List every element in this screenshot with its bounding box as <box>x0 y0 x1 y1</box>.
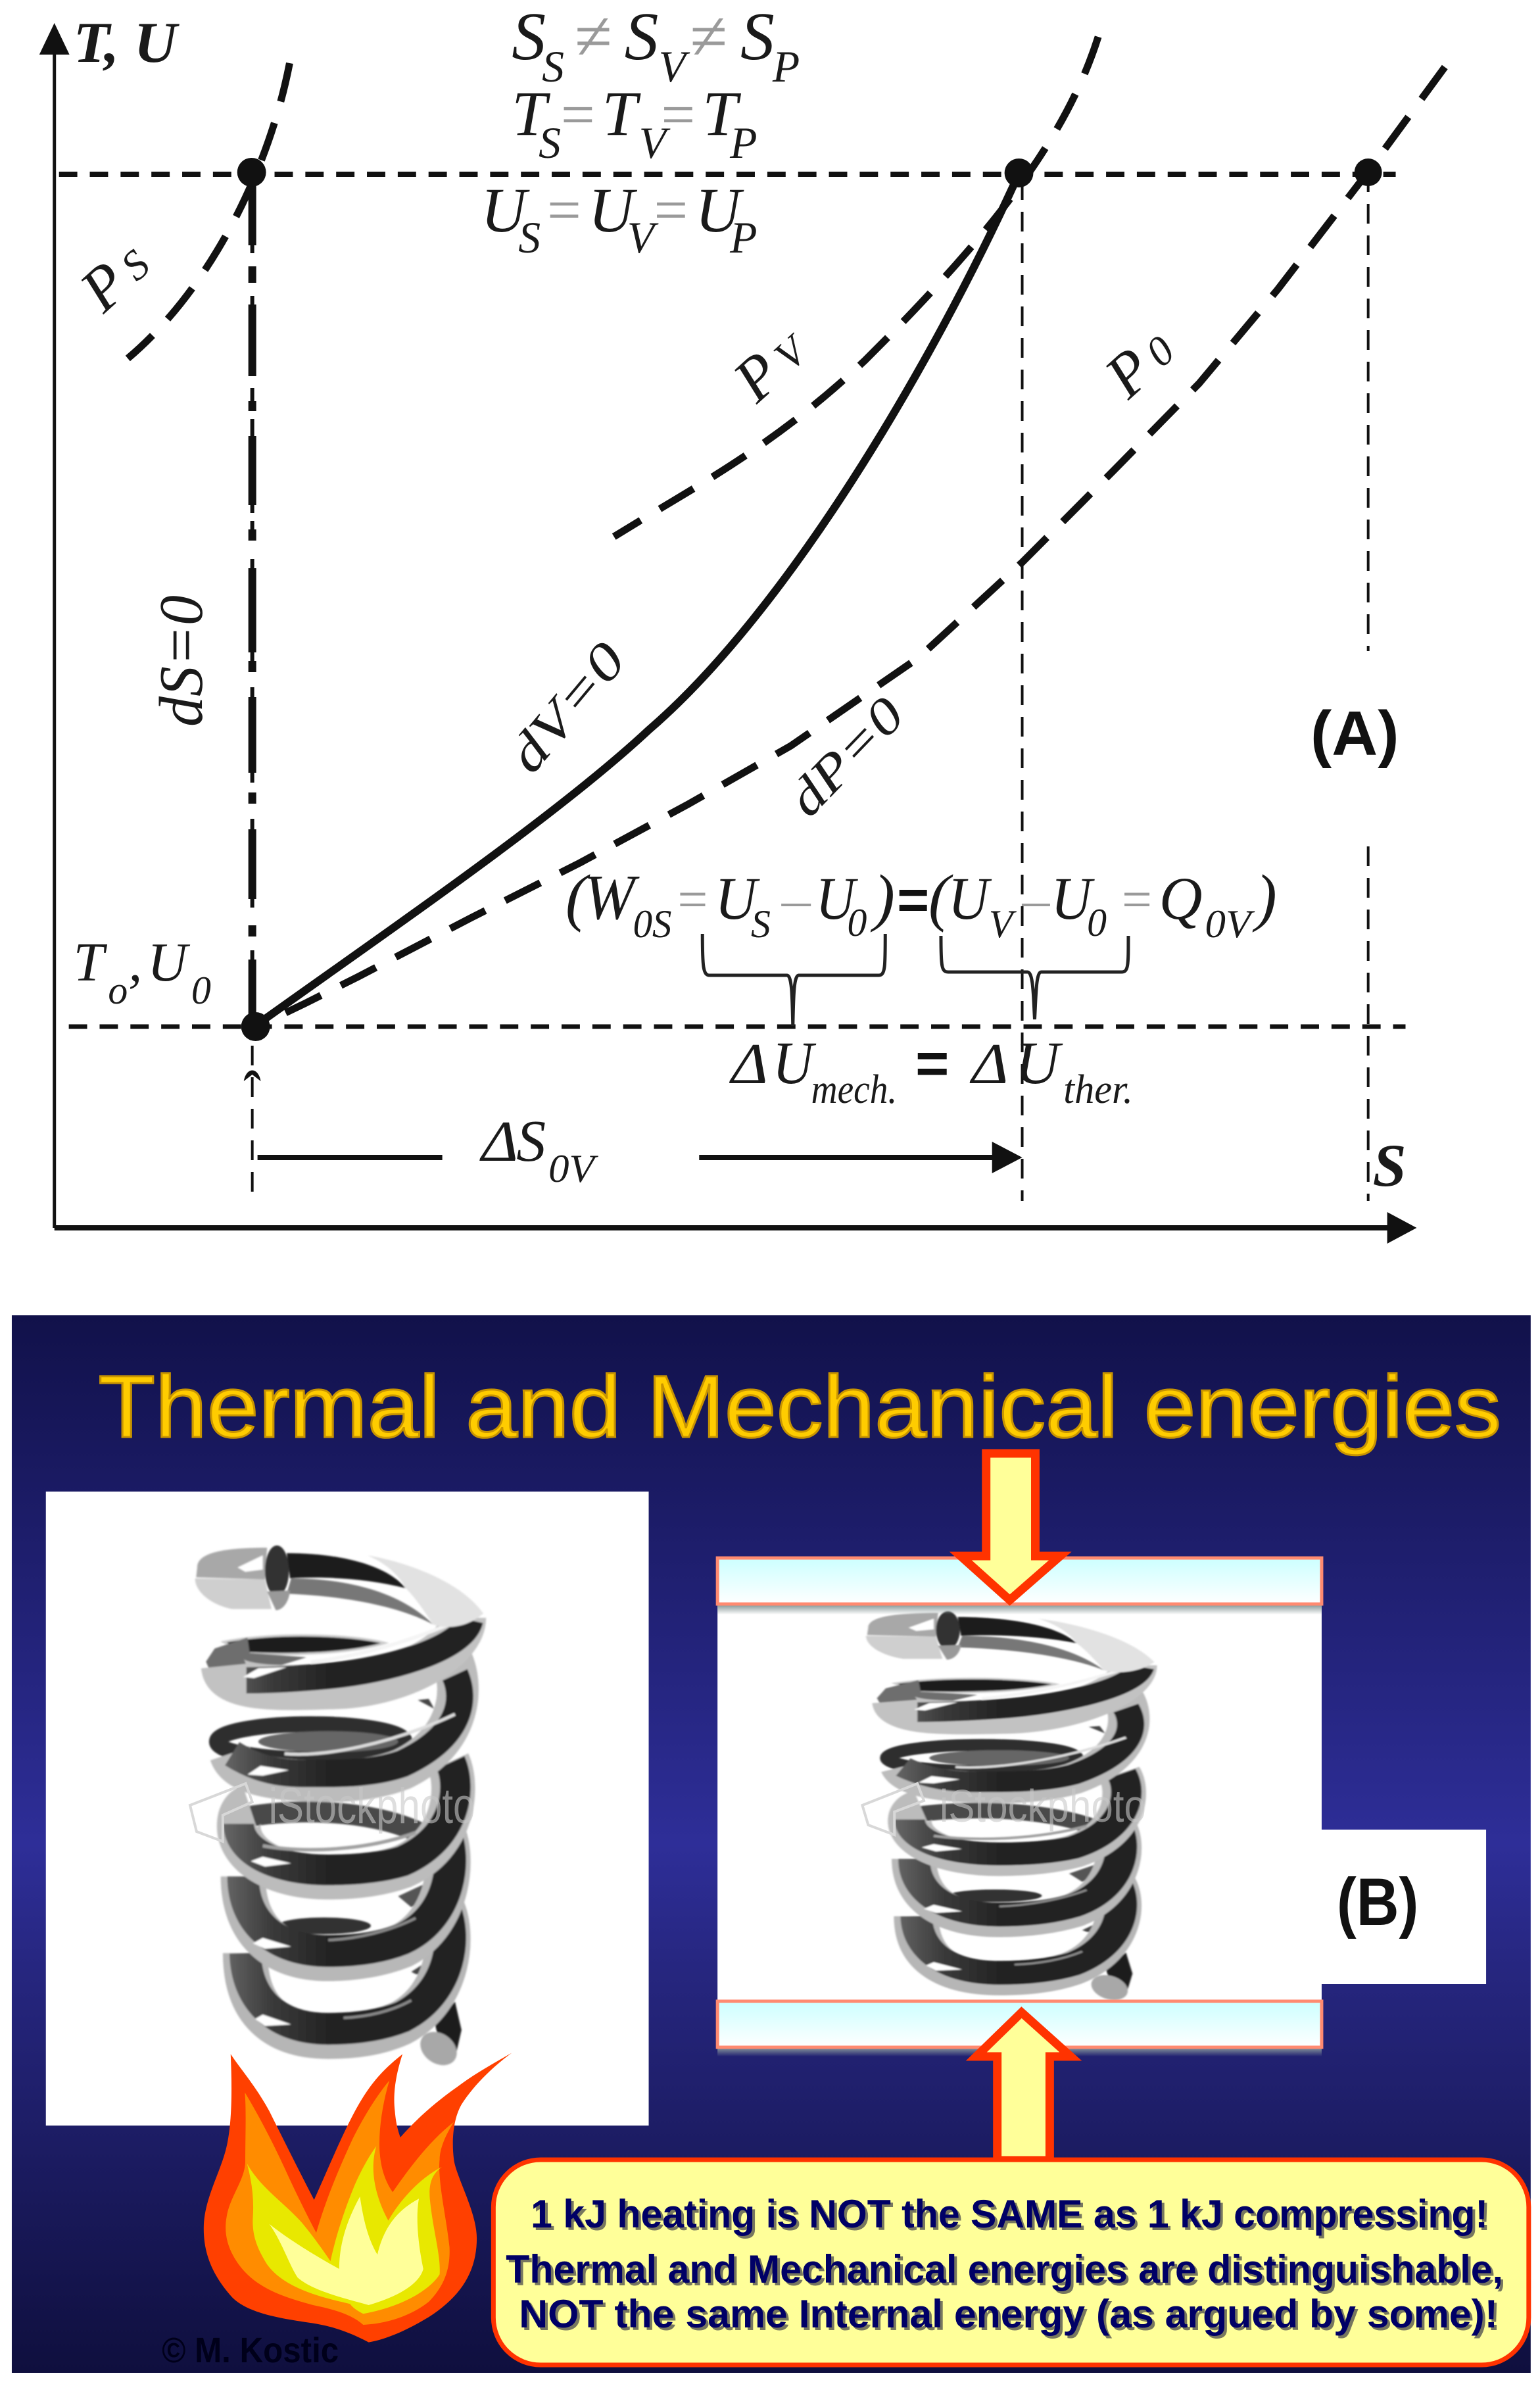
equation: delta U mechanical equals delta U thermal <box>729 1029 1133 1112</box>
right photo panel: compressed spring <box>717 1557 1486 2010</box>
label: entropy inequality: S <box>740 0 775 74</box>
horizontal dashed line at reference temperature <box>69 1025 1405 1029</box>
callout line 2: Thermal and Mechanical energies are distinguishable, <box>508 2250 1506 2294</box>
curve label: P_S: S <box>112 241 158 289</box>
equation: work equals heat <box>565 862 1277 946</box>
panel B: thermal and mechanical energies slide <box>12 1315 1531 2373</box>
equation: work equals heat: = <box>1122 869 1152 929</box>
label: entropy inequality <box>512 0 800 91</box>
label: entropy inequality: ≠ <box>575 0 612 74</box>
arrow: compressing down <box>961 1453 1060 1600</box>
label: temperature equality: V <box>639 118 671 168</box>
curve label: P_S: P <box>66 249 141 325</box>
equation: delta U mechanical equals delta U thermal: mech. <box>811 1067 897 1112</box>
isobar curve P_S <box>128 63 289 358</box>
brace: mechanical work <box>702 934 885 1026</box>
arrow: compressing up <box>976 2012 1071 2160</box>
label: T0, U0 <box>74 932 211 1012</box>
label: internal energy equality: V <box>627 213 659 262</box>
small mark under start point <box>244 1071 261 1081</box>
equation: work equals heat: 0S <box>633 902 671 946</box>
label: temperature equality: P <box>729 118 757 168</box>
label: T0, U0: U <box>147 932 191 993</box>
panel label: (B): (B) <box>1337 1864 1418 1939</box>
curve label: P_V <box>720 313 823 415</box>
curve label: dS=0: dS=0 <box>146 595 216 727</box>
label: entropy inequality: S <box>512 0 546 74</box>
label: delta S 0V: S <box>516 1109 546 1174</box>
watermark: iStockphoto <box>940 1780 1146 1832</box>
equation: work equals heat: S <box>751 902 771 946</box>
equation: work equals heat: 0 <box>1087 901 1107 944</box>
label: internal energy equality: U <box>589 176 638 245</box>
equation: work equals heat: ( <box>565 862 590 933</box>
state points <box>237 158 1382 1041</box>
panel label: (A): (A) <box>1311 698 1399 769</box>
axes with arrows <box>39 23 1416 1244</box>
chart panel A: T-S diagram <box>39 0 1445 1244</box>
label: internal energy equality: = <box>547 176 581 243</box>
entropy change arrow <box>258 1142 1023 1173</box>
constant volume curve dV=0 <box>254 174 1019 1027</box>
equation: work equals heat: 0V <box>1205 902 1255 946</box>
equation: work equals heat: U <box>948 865 992 932</box>
label: internal energy equality <box>481 176 757 262</box>
label: temperature equality: T <box>602 79 641 149</box>
equation: work equals heat: ( <box>928 862 953 933</box>
equation: work equals heat: – <box>1022 869 1050 929</box>
label: T0, U0: o <box>108 969 128 1012</box>
callout line 3: NOT the same Internal energy (as argued by some)! <box>519 2292 1498 2336</box>
curve label: P_0: 0 <box>1136 327 1184 376</box>
axis label: T, U: T, U <box>74 11 180 75</box>
icon: flame <box>204 2053 512 2343</box>
axis label: S: S <box>1373 1132 1407 1199</box>
label: delta S 0V: Δ <box>479 1110 518 1174</box>
constant entropy line dS=0 <box>249 172 256 1027</box>
curve label: P_S <box>66 229 162 325</box>
label: temperature equality <box>512 79 757 168</box>
label: entropy inequality: S <box>625 0 658 74</box>
equation: work equals heat: = <box>677 869 708 929</box>
label: internal energy equality: U <box>695 176 744 245</box>
horizontal dashed line at high temperature <box>59 172 1396 177</box>
copyright credit: © M. Kostic <box>162 2331 339 2370</box>
label: delta S 0V <box>479 1109 599 1190</box>
icon: spring compressed <box>866 1611 1154 2005</box>
callout line 3: NOT the same Internal energy (as argued by some)! <box>521 2295 1501 2339</box>
label: entropy inequality: P <box>772 42 800 91</box>
label: T0, U0: 0 <box>191 969 211 1012</box>
isobar curve P_V <box>614 37 1098 537</box>
watermark <box>190 1778 475 1841</box>
equation: work equals heat: Q <box>1159 865 1203 932</box>
callout line 1: 1 kJ heating is NOT the SAME as 1 kJ compressing! <box>531 2192 1488 2236</box>
curve label: P_0 <box>1092 315 1188 411</box>
slide title: Thermal and Mechanical energies <box>98 1358 1501 1456</box>
equation: work equals heat: ) <box>1252 862 1277 933</box>
curve label: P_0: P <box>1092 335 1166 411</box>
curve label: P_V: P <box>720 339 794 415</box>
equation: delta U mechanical equals delta U thermal: ther. <box>1063 1067 1133 1112</box>
equation: work equals heat: = <box>897 869 929 931</box>
callout line 1: 1 kJ heating is NOT the SAME as 1 kJ compressing! <box>533 2195 1491 2239</box>
label: entropy inequality: V <box>658 42 690 91</box>
callout line 2: Thermal and Mechanical energies are distinguishable, <box>506 2247 1503 2291</box>
vertical dashed guide lines <box>253 172 1368 1201</box>
label: internal energy equality: P <box>729 213 757 262</box>
equation: delta U mechanical equals delta U thermal: U <box>773 1029 817 1096</box>
equation: delta U mechanical equals delta U thermal: = <box>915 1031 949 1096</box>
icon: spring uncompressed <box>195 1545 483 2072</box>
equation: work equals heat: 0 <box>847 901 867 944</box>
equation: work equals heat: W <box>584 862 640 933</box>
label: T0, U0: , <box>128 932 142 993</box>
label: temperature equality: S <box>539 118 561 168</box>
equation: work equals heat: – <box>781 869 811 929</box>
isobar curve P_0 <box>257 67 1445 1027</box>
equation: work equals heat: U <box>715 865 760 932</box>
equation: delta U mechanical equals delta U thermal: U <box>1015 1029 1063 1096</box>
equation: work equals heat: V <box>989 902 1017 946</box>
brace: thermal heat <box>941 936 1128 1019</box>
label: entropy inequality: ≠ <box>690 0 727 74</box>
watermark: iStockphoto <box>269 1778 475 1834</box>
label: entropy inequality: S <box>542 42 564 91</box>
label: T0, U0: T <box>74 932 108 993</box>
equation: work equals heat: U <box>816 865 859 932</box>
label: temperature equality: = <box>661 81 695 148</box>
curve label: dP=0: dP=0 <box>777 686 915 827</box>
equation: delta U mechanical equals delta U thermal: Δ <box>729 1033 768 1096</box>
equation: work equals heat: U <box>1051 865 1095 932</box>
watermark <box>862 1780 1146 1835</box>
label: internal energy equality: S <box>518 213 541 262</box>
label: temperature equality: T <box>512 79 550 149</box>
label: temperature equality: T <box>702 79 741 149</box>
callout: heating vs compressing <box>493 2160 1529 2365</box>
top compression plate <box>717 1558 1322 1615</box>
label: temperature equality: = <box>561 81 595 148</box>
label: delta S 0V: 0V <box>548 1147 599 1190</box>
equation: delta U mechanical equals delta U thermal: Δ <box>970 1033 1009 1096</box>
label: internal energy equality: = <box>654 176 688 243</box>
slide background <box>12 1315 1531 2373</box>
left photo panel: free spring <box>46 1492 649 2126</box>
bottom compression plate <box>717 2001 1322 2056</box>
label: internal energy equality: U <box>481 176 530 245</box>
curve label: dV=0: dV=0 <box>497 631 637 784</box>
equation: work equals heat: ) <box>870 862 895 933</box>
curve label: P_V: V <box>765 324 819 379</box>
